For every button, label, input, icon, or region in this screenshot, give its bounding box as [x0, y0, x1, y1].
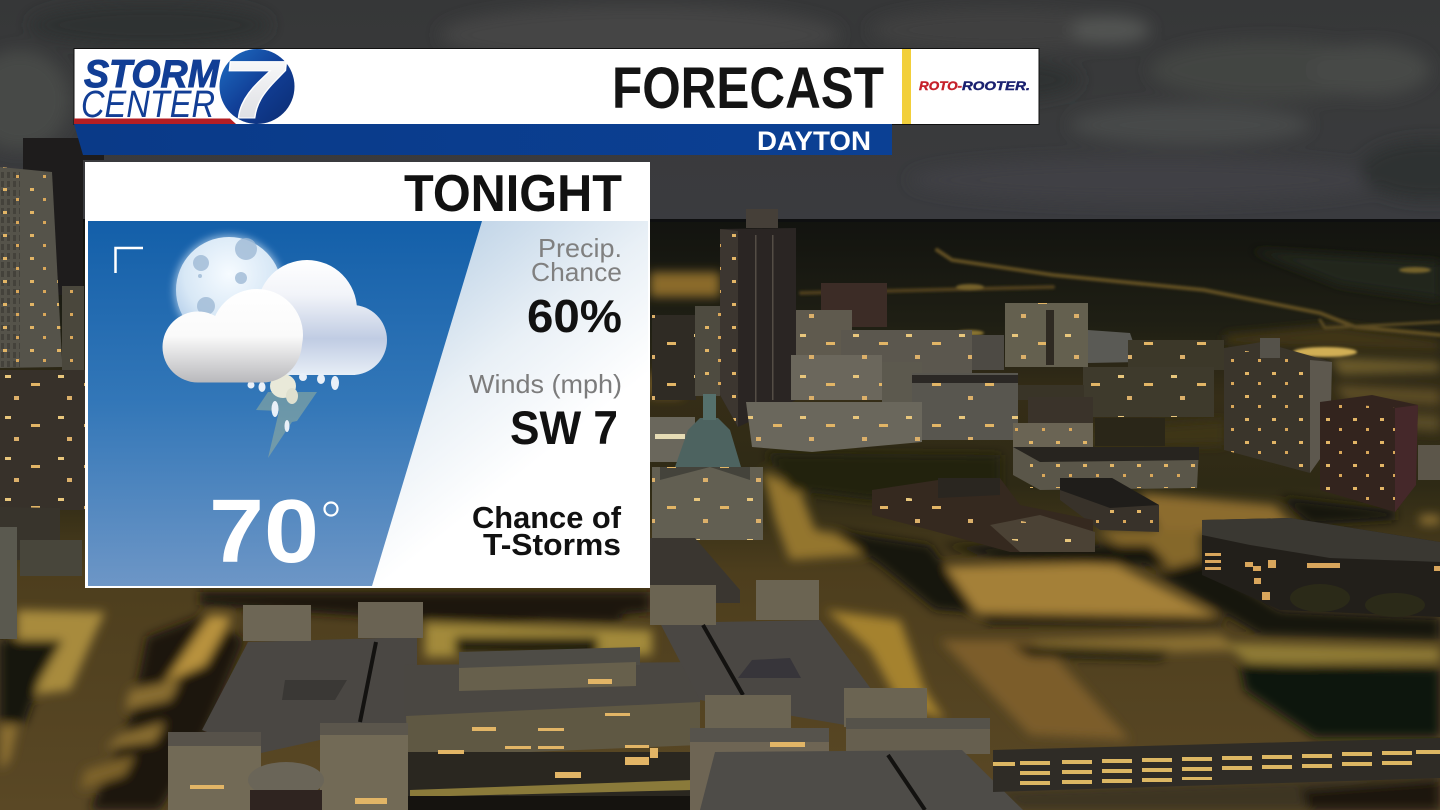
logo: Storm Center — [81, 53, 220, 126]
sponsor logo: ROOTER. — [962, 79, 1030, 93]
precip chance: 60% — [527, 290, 622, 342]
conditions text — [472, 500, 622, 562]
red accent stripe — [74, 118, 236, 124]
right data area — [88, 221, 648, 586]
forecast banner — [74, 44, 1039, 156]
background: night sky with clouds — [0, 0, 1440, 222]
background: city ground with street lights — [0, 219, 1440, 810]
logo: Storm Center: CENTER — [81, 84, 215, 126]
corner bracket — [116, 248, 143, 273]
icon: back cloud — [220, 260, 387, 375]
winds — [469, 369, 622, 454]
icon: lightning bolt — [256, 392, 317, 458]
yellow divider — [902, 49, 911, 124]
icon: rain and hail — [248, 373, 339, 432]
background: domed courthouse — [650, 394, 763, 603]
location label: DAYTON — [757, 126, 871, 156]
panel: tonight forecast — [85, 162, 650, 588]
logo: Storm Center: STORM — [84, 53, 220, 96]
conditions text: T-Storms — [483, 527, 621, 562]
title: FORECAST — [612, 56, 884, 121]
precip chance: Precip. — [538, 233, 622, 263]
conditions text: Chance of — [472, 500, 622, 535]
background: large foreground hospital building — [168, 580, 1023, 810]
temperature: 70 — [209, 482, 319, 582]
precip chance: Chance — [531, 257, 622, 287]
winds: Winds (mph) — [469, 369, 622, 399]
banner white strip — [74, 48, 1039, 124]
winds: SW 7 — [510, 401, 618, 454]
logo: channel 7: 7 — [217, 44, 299, 136]
panel frame — [85, 162, 650, 588]
blue slanted area — [88, 221, 482, 586]
background: right foreground low building — [1202, 518, 1440, 617]
icon: front cloud — [162, 289, 303, 382]
precip chance — [527, 233, 622, 342]
blue location bar — [74, 124, 892, 155]
background: mid-distance buildings — [652, 283, 1440, 552]
sponsor logo: ROTO- — [919, 79, 962, 93]
icon: moon behind clouds with storm — [162, 235, 387, 458]
background: left tower buildings — [0, 138, 104, 639]
panel heading: TONIGHT — [404, 165, 622, 223]
background: elevated walkway — [993, 738, 1440, 792]
background: central tall tower — [720, 209, 796, 427]
sponsor logo — [919, 79, 1030, 93]
